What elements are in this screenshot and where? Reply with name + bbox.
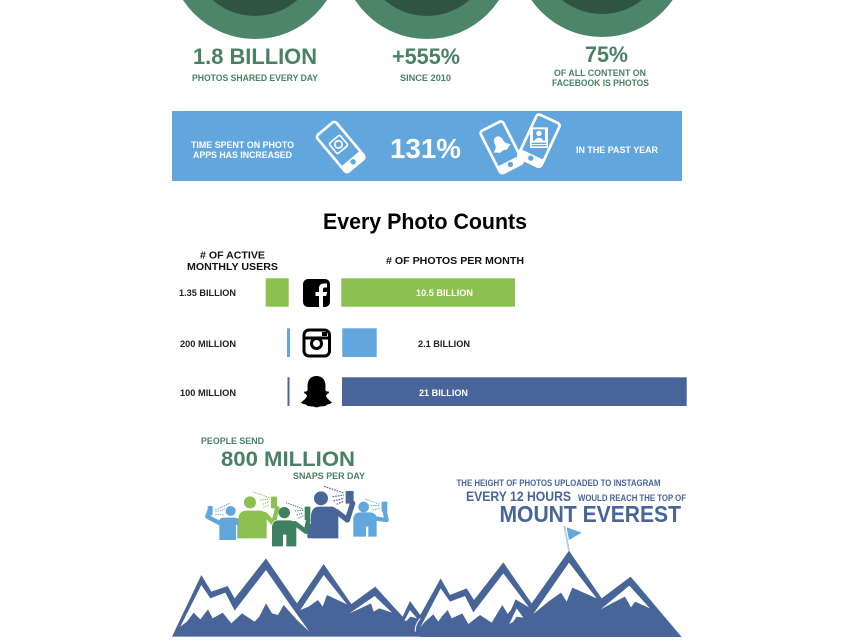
banner text: 131%: [390, 133, 461, 164]
banner text: [191, 133, 658, 164]
icon: phone with ghost: [480, 120, 524, 174]
icon: Facebook: [303, 279, 330, 307]
icon: phone with profile: [516, 113, 561, 168]
row: Snapchat: [180, 376, 687, 408]
banner text: IN THE PAST YEAR: [576, 145, 658, 156]
row: Facebook: 1.35 BILLION: [179, 288, 236, 298]
person: dark green: [272, 503, 310, 547]
row: Facebook: 10.5 BILLION: [416, 288, 473, 298]
row: Instagram: [180, 328, 470, 357]
row: Instagram: 200 MILLION: [180, 339, 236, 349]
stat: share of Facebook content: [516, 0, 688, 89]
person: navy: [307, 486, 354, 538]
text block: 800 million snaps: PEOPLE SEND: [201, 436, 264, 447]
illustration: mountains with flag: [172, 526, 682, 637]
stat: photos shared every day: 1.8 BILLION: [193, 44, 317, 69]
stat: growth since 2010: +555%: [392, 44, 460, 69]
banner text: TIME SPENT ON PHOTO: [191, 140, 294, 151]
stat: share of Facebook content: FACEBOOK IS PHOTOS: [552, 78, 649, 89]
column headers: [187, 250, 524, 273]
row: Instagram: 2.1 BILLION: [418, 339, 470, 349]
stat: photos shared every day: PHOTOS SHARED EVERY DAY: [192, 73, 319, 84]
person: light blue left: [207, 503, 241, 540]
text block: Mount Everest: [456, 478, 686, 527]
banner text: APPS HAS INCREASED: [193, 150, 292, 161]
row: Snapchat: 21 BILLION: [419, 388, 468, 398]
illustration: people taking photos: [207, 486, 387, 547]
panel: top statistics: [169, 0, 688, 89]
text block: Mount Everest: EVERY 12 HOURS: [466, 489, 571, 504]
column headers: # OF ACTIVE: [200, 250, 265, 262]
stat: growth since 2010: [341, 0, 513, 84]
row: Facebook: [179, 278, 515, 307]
heading: Every Photo Counts: Every Photo Counts: [323, 209, 527, 234]
icons: phones: [316, 113, 561, 174]
column headers: # OF PHOTOS PER MONTH: [386, 255, 524, 267]
icon: phone with camera: [316, 121, 366, 173]
person: green: [238, 492, 277, 538]
stat: growth since 2010: SINCE 2010: [400, 73, 451, 84]
text block: Mount Everest: WOULD REACH THE TOP OF: [578, 493, 686, 503]
icon: Instagram: [304, 330, 330, 356]
stat: photos shared every day: [169, 0, 341, 84]
mountains: right range with summit: [420, 526, 682, 637]
icon: summit flag: [564, 526, 582, 551]
mountains: left range: [172, 558, 432, 637]
row: Snapchat: 100 MILLION: [180, 388, 236, 398]
stat: share of Facebook content: OF ALL CONTENT ON: [554, 68, 646, 79]
stat: share of Facebook content: 75%: [585, 42, 628, 67]
text block: Mount Everest: THE HEIGHT OF PHOTOS UPLOADED TO INSTAGRAM: [456, 478, 660, 488]
text block: Mount Everest: MOUNT EVEREST: [500, 501, 682, 527]
column headers: MONTHLY USERS: [187, 261, 278, 273]
text block: 800 million snaps: 800 MILLION: [221, 447, 355, 471]
text block: 800 million snaps: SNAPS PER DAY: [293, 471, 366, 482]
panel: time spent banner: [172, 111, 682, 181]
person: light blue right: [353, 499, 387, 537]
panel: comparison chart: [179, 250, 687, 408]
icon: Snapchat ghost: [301, 376, 332, 408]
text block: 800 million snaps: [201, 436, 366, 482]
